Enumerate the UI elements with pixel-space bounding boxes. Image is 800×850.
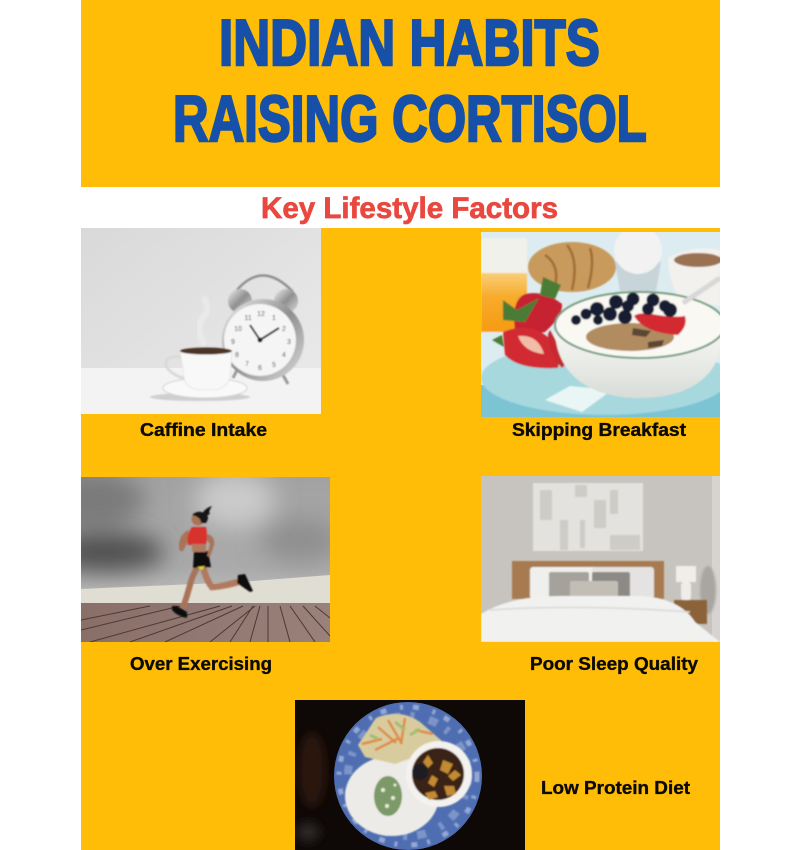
label: Over Exercising: Over Exercising	[130, 654, 272, 674]
photo: coffee cup and alarm clock: 8	[235, 352, 239, 359]
photo: coffee cup and alarm clock: 6	[258, 365, 262, 372]
photo: coffee cup and alarm clock: 10	[234, 326, 242, 333]
photo: coffee cup and alarm clock: 5	[272, 362, 276, 369]
photo: coffee cup and alarm clock: 7	[245, 361, 249, 368]
photo: coffee cup and alarm clock: 9	[231, 339, 235, 346]
yellow page panel	[81, 0, 720, 850]
label: Low Protein Diet: Low Protein Diet	[541, 778, 690, 798]
title: RAISING CORTISOL	[173, 84, 647, 156]
subtitle band: Key Lifestyle Factors: Key Lifestyle Factors	[261, 192, 558, 225]
label: Caffine Intake: Caffine Intake	[140, 420, 267, 440]
photo: healthy breakfast bowl	[481, 226, 729, 417]
label: Poor Sleep Quality: Poor Sleep Quality	[530, 654, 698, 674]
label: Skipping Breakfast: Skipping Breakfast	[512, 420, 686, 440]
photo: coffee cup and alarm clock: 11	[244, 315, 252, 322]
title	[173, 7, 647, 156]
photo: coffee cup and alarm clock: 1	[272, 315, 276, 322]
photo: coffee cup and alarm clock: 2	[282, 326, 286, 333]
photo: coffee cup and alarm clock: 12	[257, 311, 265, 318]
photo: tidy bedroom	[481, 476, 720, 642]
photo: coffee cup and alarm clock: 4	[282, 352, 286, 359]
photo: coffee cup and alarm clock	[81, 228, 321, 414]
photo: plate of rice and curry	[295, 700, 525, 850]
photo: coffee cup and alarm clock: 3	[287, 339, 291, 346]
photo: woman running on boardwalk	[81, 477, 330, 642]
subtitle band: Key Lifestyle Factors	[81, 187, 720, 228]
title: INDIAN HABITS	[219, 7, 600, 79]
